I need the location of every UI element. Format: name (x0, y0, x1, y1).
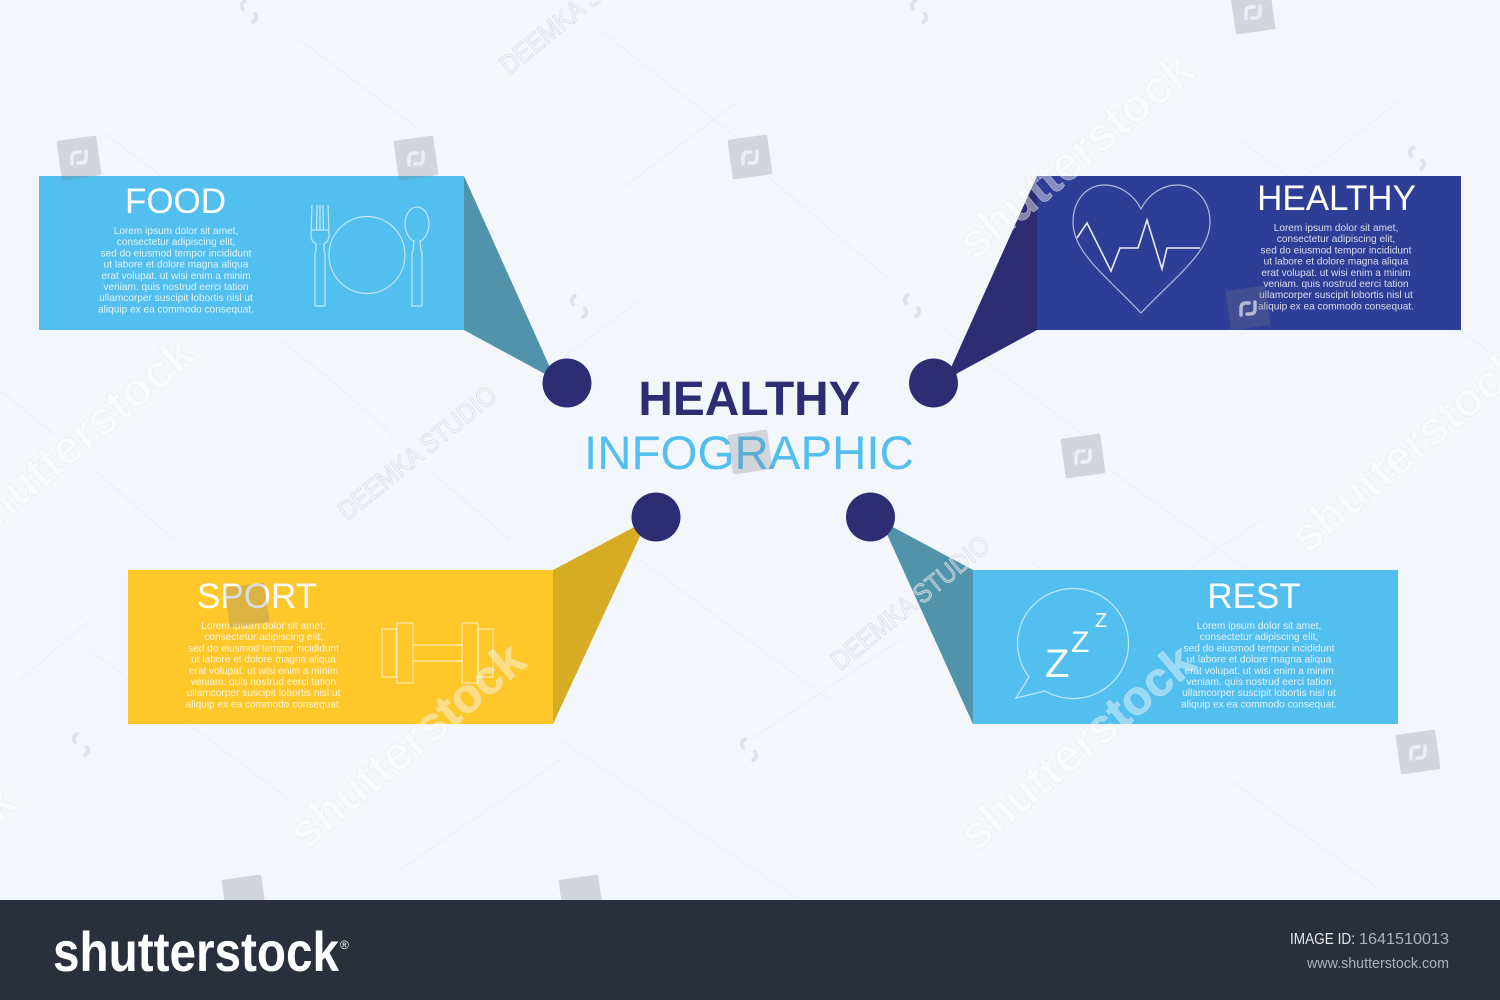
image id number: 1641510013 (1359, 931, 1449, 948)
icon: sleep speech bubble: Z (1071, 626, 1089, 659)
rest heading: REST (1207, 577, 1301, 616)
food panel background (39, 176, 464, 330)
footer bar (0, 900, 1500, 1000)
connector dot: food (542, 358, 592, 408)
panel: sport (128, 524, 642, 724)
watermarks: shutterstock (948, 42, 1204, 270)
sport body text: aliquip ex ea commodo consequat. (186, 699, 342, 710)
rest body text: erat volupat. ut wisi enim a minim (1184, 666, 1334, 677)
healthy body text: ullamcorper suscipit lobortis nisl ut (1259, 290, 1413, 301)
healthy body text: erat volupat. ut wisi enim a minim (1261, 268, 1411, 279)
rest body text: ut labore et dolore magna aliqua (1187, 655, 1332, 666)
watermarks: shutterstock (279, 632, 535, 860)
title (584, 373, 914, 480)
food body text: veniam. quis nostrud eerci tation (103, 282, 249, 293)
image id: IMAGE ID: (1290, 931, 1355, 948)
panel: healthy (949, 176, 1461, 374)
food body text: erat volupat. ut wisi enim a minim (101, 271, 251, 282)
sport heading: SPORT (197, 577, 317, 616)
connector dot: rest (846, 492, 895, 542)
watermarks: shutterstock (949, 634, 1205, 862)
food connector (464, 176, 552, 374)
icon: sleep speech bubble (1016, 589, 1129, 699)
rest body text: ullamcorper suscipit lobortis nisl ut (1182, 688, 1336, 699)
rest body text: Lorem ipsum dolor sit amet, (1197, 621, 1321, 632)
registered mark: ® (340, 938, 349, 952)
rest body text: aliquip ex ea commodo consequat. (1181, 699, 1337, 710)
healthy body text: veniam. quis nostrud eerci tation (1263, 279, 1409, 290)
healthy body text: consectetur adipiscing elit, (1277, 234, 1395, 245)
sport body text: veniam. quis nostrud eerci tation (191, 677, 336, 688)
food body text: ullamcorper suscipit lobortis nisl ut (99, 293, 253, 304)
food body text: consectetur adipiscing elit, (117, 237, 235, 248)
sport connector (553, 524, 642, 724)
sport panel background (128, 570, 553, 724)
panel: food (39, 176, 552, 374)
connector dot: sport (632, 492, 680, 542)
rest body text: consectetur adipiscing elit, (1200, 632, 1318, 643)
rest body text: sed do eiusmod tempor incididunt (1184, 643, 1335, 654)
sport body text: ut labore et dolore magna aliqua (191, 655, 336, 666)
icon: plate, fork and spoon (311, 205, 429, 306)
rest panel background (973, 570, 1398, 724)
healthy body text: sed do eiusmod tempor incididunt (1261, 245, 1412, 256)
connector dot: healthy (909, 358, 958, 408)
sport body text: ullamcorper suscipit lobortis nisl ut (187, 688, 341, 699)
sport body text: Lorem ipsum dolor sit amet, (201, 621, 326, 632)
title: INFOGRAPHIC (584, 427, 914, 480)
website url: www.shutterstock.com (1306, 956, 1449, 972)
healthy connector (949, 176, 1037, 374)
sport body text: erat volupat. ut wisi enim a minim (189, 666, 338, 677)
watermarks: DEEMKA STUDIO (332, 380, 503, 526)
healthy panel background (1037, 176, 1461, 330)
icon: heart with pulse (1073, 185, 1210, 313)
food heading: FOOD (125, 182, 226, 221)
food body text: sed do eiusmod tempor incididunt (101, 248, 252, 259)
healthy body text: ut labore et dolore magna aliqua (1264, 257, 1409, 268)
watermarks: DEEMKA STUDIO (825, 530, 996, 676)
panel: rest (886, 525, 1398, 724)
icon: dumbbell (382, 623, 493, 683)
healthy body text: aliquip ex ea commodo consequat. (1258, 301, 1414, 312)
title: HEALTHY (638, 373, 861, 426)
food body text: Lorem ipsum dolor sit amet, (114, 226, 238, 237)
rest body text: veniam. quis nostrud eerci tation (1186, 677, 1332, 688)
healthy body text: Lorem ipsum dolor sit amet, (1274, 223, 1398, 234)
icon: sleep speech bubble: Z (1045, 642, 1069, 686)
sport body text: sed do eiusmod tempor incididunt (188, 643, 339, 654)
food body text: ut labore et dolore magna aliqua (104, 260, 249, 271)
shutterstock logo: shutterstock (53, 920, 340, 983)
food body text: aliquip ex ea commodo consequat. (98, 304, 254, 315)
icon: sleep speech bubble: Z (1095, 610, 1107, 632)
sport body text: consectetur adipiscing elit, (204, 632, 323, 643)
rest connector (886, 525, 973, 724)
healthy heading: HEALTHY (1257, 179, 1416, 218)
